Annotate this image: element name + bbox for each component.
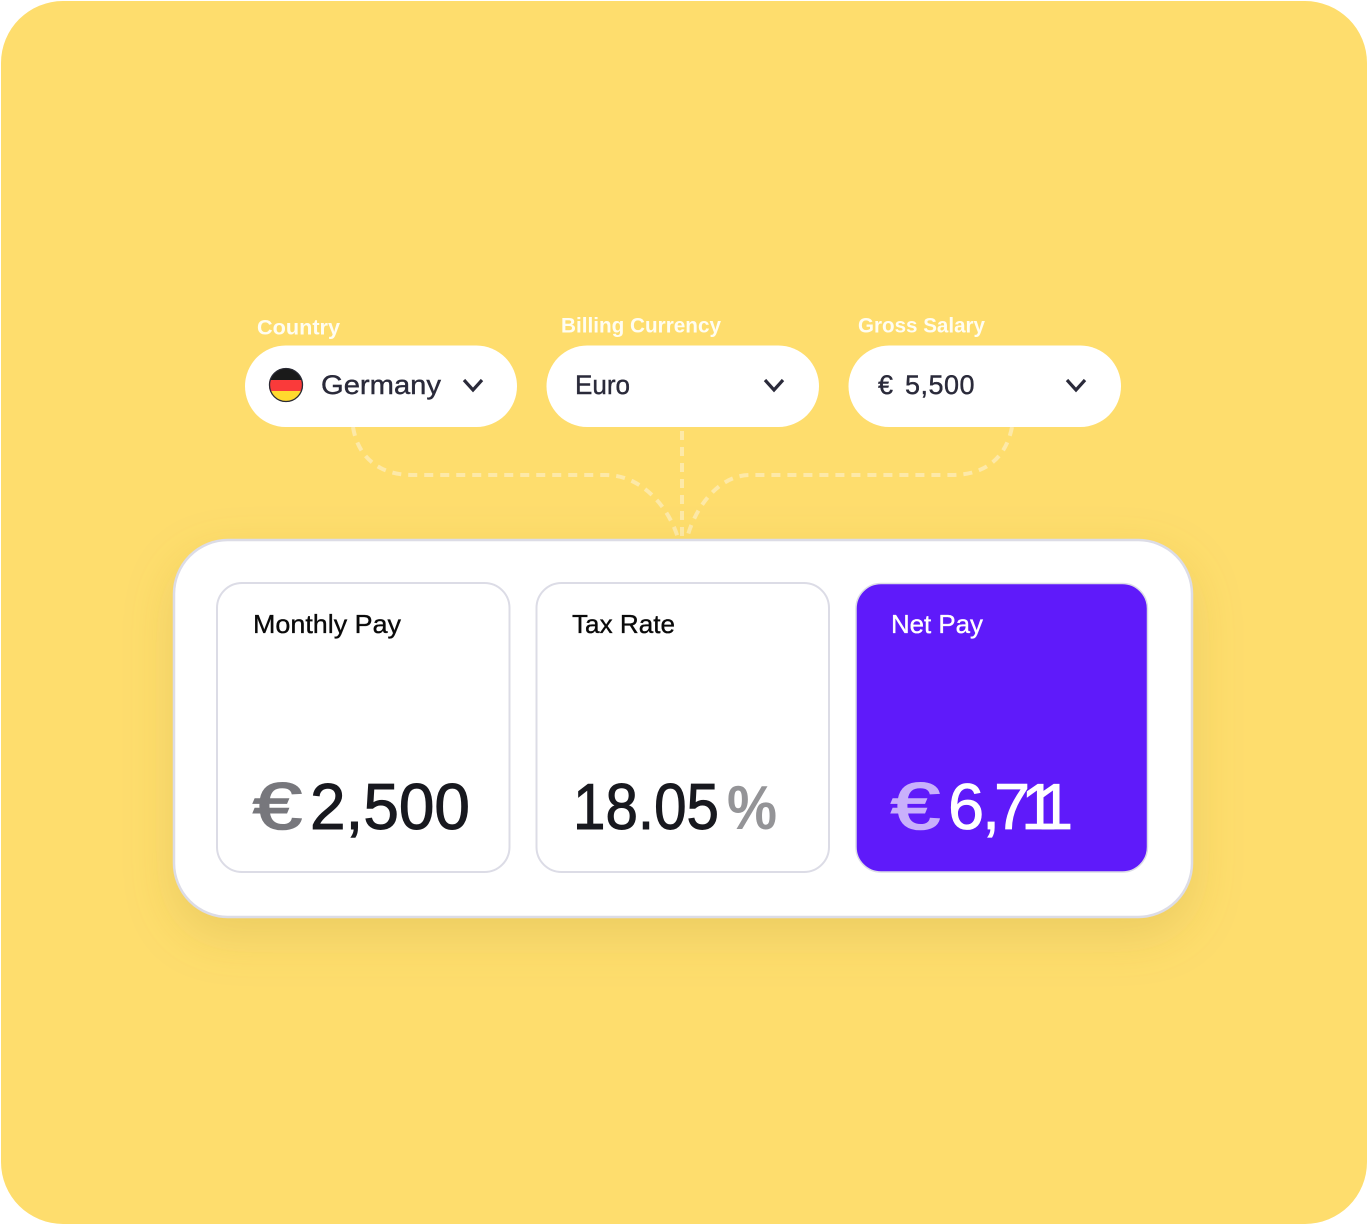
dropdown: Germany <box>245 346 517 427</box>
card title: Net Pay <box>891 609 983 639</box>
field label: Country: Country <box>257 316 340 340</box>
field label: Gross Salary: Gross Salary <box>858 314 985 338</box>
value: Germany: Germany <box>321 370 442 400</box>
card: Tax Rate <box>536 583 829 872</box>
card: Monthly Pay <box>217 583 510 872</box>
rate: 18.05 <box>573 770 719 843</box>
euro sign: € <box>891 769 940 843</box>
amount: 2,500 <box>310 770 470 843</box>
icon: chevron <box>464 380 482 390</box>
amount: 6,711 <box>948 770 1073 843</box>
icon: chevron <box>765 380 783 390</box>
dropdown: Gross Salary <box>848 346 1121 427</box>
value: 5,500 euros: 5,500 <box>905 370 975 400</box>
field label: Billing Currency: Billing Currency <box>561 314 721 338</box>
results panel <box>174 540 1192 917</box>
euro sign: € <box>253 769 302 843</box>
value: 5,500 euros: € <box>878 370 893 400</box>
card: Net Pay <box>856 584 1148 872</box>
dropdown: Euro <box>546 346 819 427</box>
icon: German flag <box>269 368 303 403</box>
value: Euro: Euro <box>575 370 630 400</box>
connector lines <box>353 427 1012 539</box>
icon: chevron <box>1067 380 1085 390</box>
percent sign: % <box>727 774 777 843</box>
card title: Monthly Pay <box>253 609 401 639</box>
card title: Tax Rate <box>572 609 675 639</box>
